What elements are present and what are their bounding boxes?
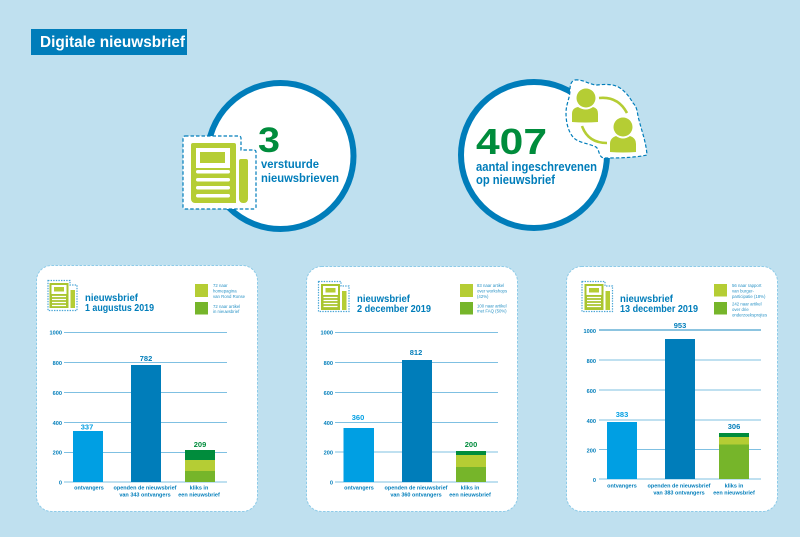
bar chart: [321, 330, 498, 498]
label: aantal ingeschrevenen op nieuwsbrief: op nieuwsbrief: [476, 173, 556, 187]
legend: 100 naar artikel: [477, 304, 507, 308]
bar chart: van 383 ontvangers: [653, 490, 705, 496]
bar chart: 0: [330, 480, 333, 486]
bar chart: 1000: [321, 330, 333, 336]
bar chart: kliks in: [461, 486, 480, 492]
bar chart: 400: [587, 419, 596, 425]
legend: [714, 283, 767, 318]
legend: van Rond Ronse: [213, 294, 246, 299]
legend: (42%): [477, 294, 489, 299]
stat circle: verstuurde nieuwsbrieven: [183, 83, 354, 229]
heading: nieuwsbrief: [85, 292, 138, 304]
legend: 72 naar artikel: [213, 304, 240, 309]
label: verstuurde nieuwsbrieven: [261, 157, 339, 185]
heading: [357, 293, 431, 315]
bar chart: 200: [465, 440, 477, 449]
title: [31, 29, 187, 55]
icon: people exchange: [566, 80, 647, 158]
heading: 1 augustus 2019: [85, 302, 154, 314]
stat circle: aantal ingeschrevenen: [461, 80, 647, 228]
bar chart: 337: [81, 422, 93, 432]
legend: 242 naar artikel: [732, 302, 762, 306]
bar chart: ontvangers: [607, 484, 637, 490]
bar chart: 812: [410, 348, 422, 357]
icon: newspaper: [183, 136, 256, 209]
bar chart: [584, 321, 761, 496]
bar chart: openden de nieuwsbrief: [385, 486, 448, 492]
legend: [460, 283, 507, 314]
bar chart: 200: [53, 450, 62, 456]
bar chart: 800: [587, 359, 596, 365]
bar chart: [50, 330, 227, 498]
bar chart: 360: [352, 413, 364, 422]
bar chart: een nieuwsbrief: [178, 492, 220, 498]
bar chart: 200: [324, 450, 333, 456]
bar chart: openden de nieuwsbrief: [648, 484, 711, 490]
bar chart: 800: [324, 361, 333, 367]
legend: 56 naar rapport: [732, 283, 762, 288]
legend: 83 naar artikel: [477, 283, 504, 288]
panel: nieuwsbrief 13 december 2019: [566, 266, 778, 512]
heading: [85, 292, 154, 314]
bar chart: kliks in: [190, 486, 209, 492]
label: aantal ingeschrevenen op nieuwsbrief: aantal ingeschrevenen: [476, 160, 597, 174]
bar chart: een nieuwsbrief: [713, 490, 755, 496]
bar chart: 1000: [50, 330, 62, 336]
icon: newspaper small: [318, 282, 349, 312]
bar chart: 400: [53, 421, 62, 427]
label: aantal ingeschrevenen op nieuwsbrief: [476, 160, 597, 187]
icon: newspaper small: [48, 280, 77, 310]
label: verstuurde nieuwsbrieven: nieuwsbrieven: [261, 171, 339, 185]
bar chart: 400: [324, 421, 333, 427]
bar chart: 209: [194, 440, 206, 449]
value: 407: 407: [476, 121, 547, 162]
legend: homepagina: [213, 288, 237, 294]
bar chart: van 343 ontvangers: [119, 492, 171, 498]
legend: met FAQ (50%): [477, 308, 507, 314]
bar chart: 600: [587, 389, 596, 395]
legend: 72 naar: [213, 283, 228, 288]
legend: in nieuwsbrief: [213, 309, 240, 314]
bar chart: 953: [674, 321, 686, 330]
bar chart: 1000: [584, 329, 596, 335]
legend: van burger-: [732, 288, 755, 294]
bar chart: kliks in: [725, 484, 744, 490]
title: Digitale nieuwsbrief: [40, 34, 186, 51]
bar chart: ontvangers: [74, 486, 104, 492]
legend: [195, 283, 246, 314]
heading: nieuwsbrief: [357, 293, 410, 305]
bar chart: 782: [140, 354, 152, 363]
bar chart: 600: [53, 391, 62, 397]
heading: 13 december 2019: [620, 303, 698, 315]
bar chart: openden de nieuwsbrief: [114, 486, 177, 492]
bar chart: ontvangers: [344, 486, 374, 492]
heading: nieuwsbrief: [620, 293, 673, 305]
bar chart: 0: [593, 478, 596, 484]
legend: over workshops: [477, 288, 507, 294]
bar chart: een nieuwsbrief: [449, 492, 491, 498]
legend: participatie (18%): [732, 294, 766, 299]
bar chart: 200: [587, 448, 596, 454]
bar chart: 800: [53, 361, 62, 367]
bar chart: 0: [59, 480, 62, 486]
bar chart: 600: [324, 391, 333, 397]
heading: [620, 293, 698, 315]
panel: nieuwsbrief 1 augustus 2019: [36, 266, 258, 512]
label: verstuurde nieuwsbrieven: verstuurde: [261, 157, 319, 171]
value: 3: 3: [258, 121, 280, 160]
legend: over drie: [732, 307, 749, 312]
bar chart: 306: [728, 422, 740, 431]
bar chart: 383: [616, 410, 628, 419]
icon: newspaper small: [582, 282, 612, 312]
heading: 2 december 2019: [357, 303, 431, 315]
bar chart: van 360 ontvangers: [390, 492, 442, 498]
legend: onderzoeksprojtes: [732, 312, 767, 318]
panel: nieuwsbrief 2 december 2019: [306, 266, 518, 512]
